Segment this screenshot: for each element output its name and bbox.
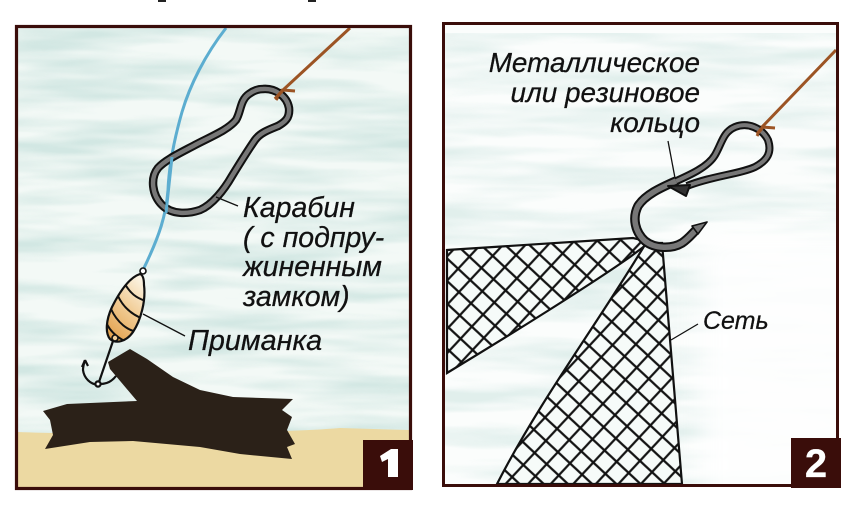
label: carabiner: ( с подпру- <box>243 222 384 254</box>
treble hook <box>82 341 116 387</box>
panel 2: snap hook with landing net <box>444 24 856 517</box>
label: ring: Металлическое <box>489 47 700 78</box>
badge 2 <box>791 438 841 488</box>
label: ring: или резиновое <box>510 77 700 108</box>
orange cord 2 <box>752 50 836 136</box>
label: net: Сеть <box>703 307 769 335</box>
label: carabiner <box>216 192 384 313</box>
carabiner with hook end <box>635 125 769 247</box>
label: carabiner: Карабин <box>243 192 355 224</box>
right net section <box>497 243 682 484</box>
panel 1: snap hook with lure <box>16 26 413 490</box>
carabiner <box>153 89 289 213</box>
lure label <box>143 314 322 357</box>
label: ring: кольцо <box>610 107 700 138</box>
badge 1 <box>363 440 413 490</box>
label: net <box>671 307 769 340</box>
fishing line <box>143 28 226 270</box>
panel 1 frame <box>16 26 410 488</box>
label: carabiner: жиненным <box>241 251 382 283</box>
lure <box>106 268 146 343</box>
left net section <box>447 238 650 373</box>
label: carabiner: замком) <box>242 281 350 313</box>
clipped text fragments above the panels <box>158 0 316 2</box>
panel 1 sand bottom <box>18 428 409 487</box>
orange cord <box>272 28 350 100</box>
lure label: Приманка <box>188 325 322 357</box>
panel 2 water background <box>445 33 836 484</box>
label: ring <box>489 47 700 178</box>
blue line over carabiner <box>166 157 172 213</box>
panel 2 frame <box>444 24 838 486</box>
panel 1 water background <box>18 28 409 433</box>
log <box>43 349 295 459</box>
badge 2: 2 <box>805 442 827 486</box>
